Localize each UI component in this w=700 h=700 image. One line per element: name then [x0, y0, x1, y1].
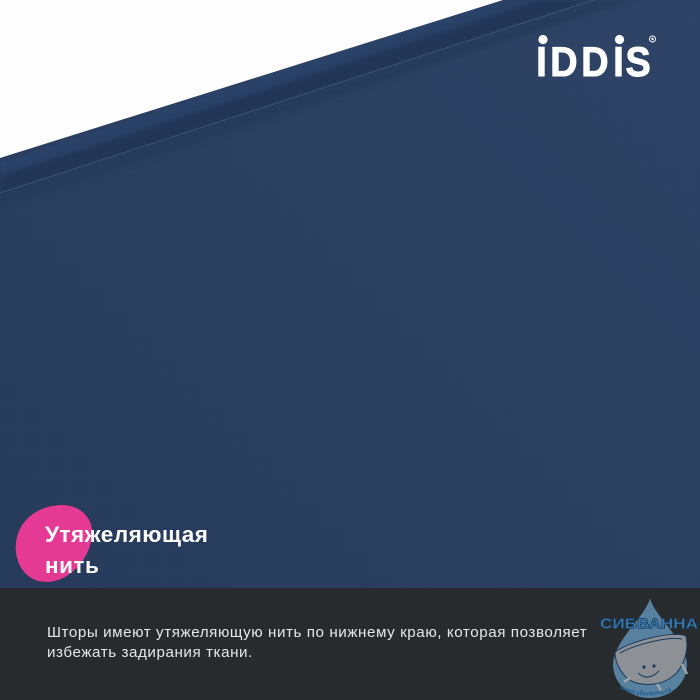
- heading: Утяжеляющая: [45, 522, 208, 547]
- description text: Шторы имеют утяжеляющую нить по нижнему краю, которая позволяет: [47, 624, 587, 641]
- icon: water drop: [613, 598, 687, 698]
- icon: bathtub: [615, 634, 687, 692]
- description text: [47, 624, 587, 661]
- footer panel: [0, 588, 700, 700]
- brand logo: IDDIS: IDDIS: [536, 39, 651, 85]
- description text: избежать задирания ткани.: [47, 644, 253, 661]
- heading: [45, 522, 208, 578]
- website url: www.sibvanna.ru: [621, 686, 672, 696]
- brand name: СИБВАННА: [600, 616, 698, 632]
- heading: нить: [45, 553, 99, 578]
